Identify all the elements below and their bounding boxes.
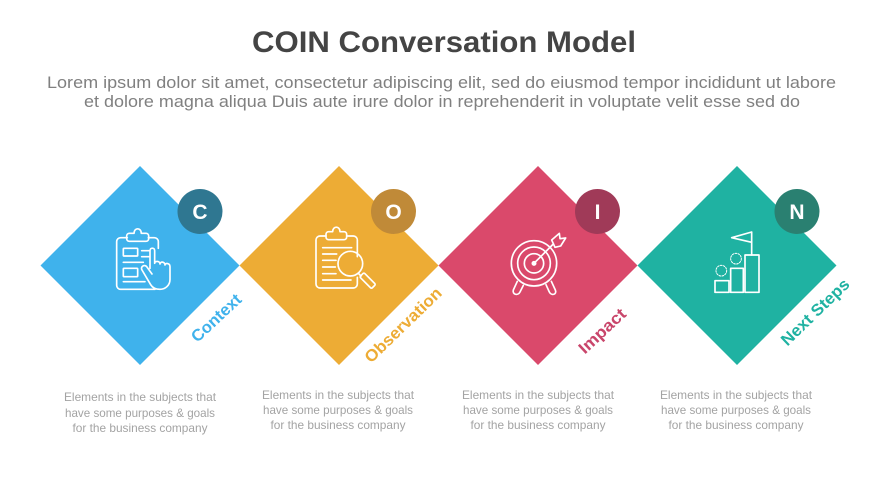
subtitle text block: et dolore magna aliqua Duis aute irure dolor in reprehenderit in voluptate velit esse sed do <box>84 92 800 111</box>
panel: Next Steps <box>638 166 853 432</box>
caption: Context: have some purposes & goals <box>65 406 215 420</box>
badge: O: O <box>385 201 402 224</box>
diamond: Next Steps <box>638 166 836 365</box>
icon: target with arrow <box>511 233 566 294</box>
caption: Impact: Elements in the subjects that <box>462 388 615 402</box>
diamond: Context <box>40 166 240 365</box>
badge: C <box>178 189 222 234</box>
caption: Next Steps: Elements in the subjects that <box>660 388 813 402</box>
label: Context: Context <box>188 290 246 346</box>
caption: Context <box>64 390 217 435</box>
label: Observation: Observation <box>361 284 446 367</box>
caption: Observation: Elements in the subjects that <box>262 388 415 402</box>
caption: Observation: have some purposes & goals <box>263 403 413 417</box>
subtitle text block: Lorem ipsum dolor sit amet, consectetur adipiscing elit, sed do eiusmod tempor incididunt ut labore <box>47 73 836 92</box>
caption: Observation <box>262 388 415 432</box>
caption: Next Steps: have some purposes & goals <box>661 403 811 417</box>
caption: Next Steps: for the business company <box>668 418 804 432</box>
icon: stair steps with flag <box>715 232 759 292</box>
label: Impact: Impact <box>575 305 630 358</box>
panel: Context <box>40 166 246 435</box>
badge: N: N <box>789 201 805 224</box>
diamond: Observation <box>240 166 438 365</box>
caption: Context: Elements in the subjects that <box>64 390 217 404</box>
caption: Impact: have some purposes & goals <box>463 403 613 417</box>
label: Next Steps: Next Steps <box>778 275 853 349</box>
panel: Impact <box>438 166 638 432</box>
badge: I <box>575 189 620 234</box>
diamond: Impact <box>438 166 638 365</box>
caption: Impact <box>462 388 615 432</box>
icon: clipboard with pointing hand <box>117 229 170 289</box>
caption: Impact: for the business company <box>470 418 606 432</box>
badge: I: I <box>595 201 600 224</box>
subtitle text block <box>47 73 836 111</box>
caption: Next Steps <box>660 388 813 432</box>
caption: Observation: for the business company <box>270 418 406 432</box>
badge: C: C <box>192 201 208 224</box>
badge: N <box>774 189 820 234</box>
badge: O <box>371 189 416 234</box>
title: COIN Conversation Model <box>252 26 636 59</box>
caption: Context: for the business company <box>72 421 208 435</box>
panel: Observation <box>240 166 446 432</box>
icon: clipboard with magnifier <box>316 227 376 289</box>
